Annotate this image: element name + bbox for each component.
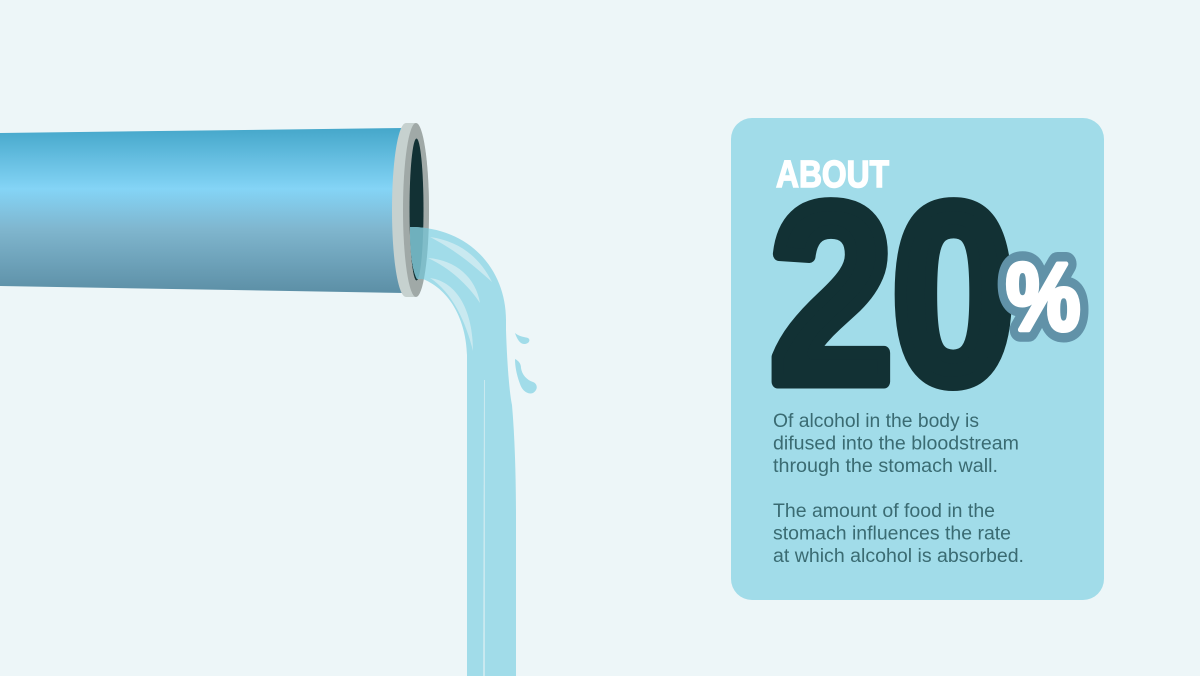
pipe rim outer — [392, 123, 429, 297]
icon: water stream — [410, 227, 516, 676]
pipe rim inner — [403, 123, 429, 297]
big number: 20: 2 — [770, 152, 893, 436]
pipe body — [0, 128, 404, 293]
panel: statistic card — [731, 118, 1104, 600]
water over opening — [410, 227, 424, 279]
infographic — [0, 118, 1104, 676]
text block: description: The amount of food in the — [773, 501, 995, 522]
water body — [410, 227, 516, 676]
percent sign: % — [1006, 245, 1080, 351]
text block: description: difused into the bloodstream — [773, 434, 1019, 454]
text block: description: Of alcohol in the body is — [773, 411, 979, 432]
text block: description — [773, 411, 1024, 567]
droplet large — [515, 359, 537, 393]
percent sign: % — [1006, 245, 1080, 351]
water over rim — [410, 227, 429, 280]
droplet small — [515, 333, 529, 344]
water highlights — [428, 237, 492, 676]
pipe opening — [410, 138, 424, 280]
card background — [731, 118, 1104, 600]
text block: description: at which alcohol is absorbed. — [773, 546, 1024, 567]
icon: pipe — [0, 123, 429, 297]
big number: 20 — [770, 152, 1015, 436]
text block: description: through the stomach wall. — [773, 456, 998, 477]
heading: about: ABOUT — [776, 154, 889, 196]
text block: description: stomach influences the rate — [773, 524, 1011, 544]
big number: 20: 0 — [892, 152, 1015, 436]
icon: water droplets — [515, 333, 537, 393]
